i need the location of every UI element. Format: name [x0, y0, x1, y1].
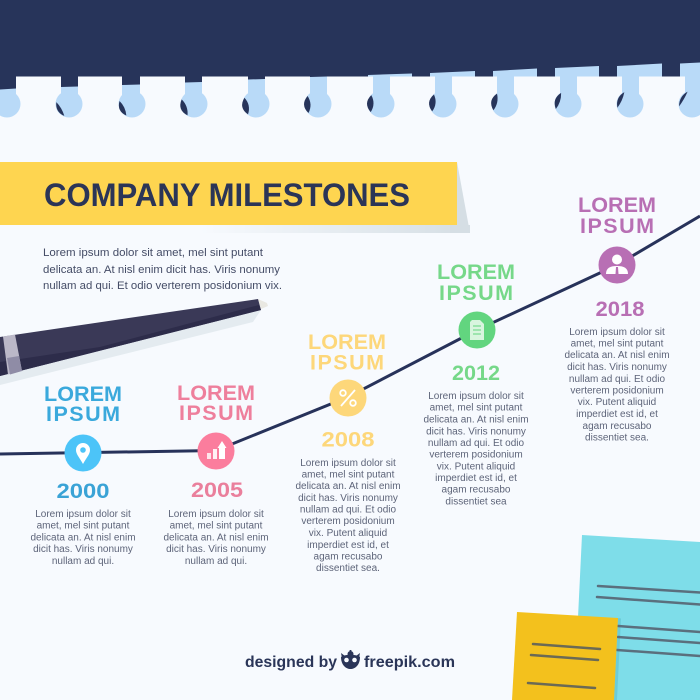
title: COMPANY MILESTONES [44, 177, 410, 213]
body text: 2005: delicata an. At nisl enim [163, 532, 269, 544]
body text: 2008: amet, mel sint putant [302, 470, 395, 480]
year: 2005: 2005 [191, 479, 243, 502]
heading: 2018: IPSUM [580, 214, 654, 238]
footer credit: designed by [245, 654, 337, 671]
body text: 2000: delicata an. At nisl enim [30, 532, 136, 544]
dark header band with binder tabs [0, 0, 700, 90]
footer credit: freepik.com [364, 654, 455, 671]
year: 2000: 2000 [56, 480, 110, 503]
heading: 2005 [177, 381, 255, 425]
body text: 2005: Lorem ipsum dolor sit [168, 509, 264, 520]
intro text: nullam ad qui. Et odio verterem posidonium vix. [43, 280, 282, 292]
body text: 2012: vix. Putent aliquid [437, 462, 515, 472]
body text: 2018: dicit has. Viris nonumy [567, 362, 667, 373]
footer credit [245, 650, 455, 671]
heading: 2000: IPSUM [46, 402, 120, 426]
body text: 2012: verterem posidonium [429, 450, 523, 460]
body text: 2018 [564, 327, 670, 444]
body text: 2008: delicata an. At nisl enim [295, 481, 401, 492]
heading: 2008: IPSUM [310, 350, 384, 374]
body text: 2018: Lorem ipsum dolor sit [569, 327, 665, 338]
pen [0, 299, 268, 385]
year: 2008: 2008 [322, 428, 375, 452]
body text: 2018: agam recusabo [583, 421, 652, 432]
intro text: Lorem ipsum dolor sit amet, mel sint putant [43, 247, 263, 259]
heading: 2005: IPSUM [179, 401, 253, 425]
body text: 2018: dissentiet sea. [585, 432, 649, 444]
milestone 2008 [295, 330, 401, 574]
year: 2018: 2018 [596, 298, 645, 321]
heading: 2018: LOREM [578, 193, 656, 217]
body text: 2008: Lorem ipsum dolor sit [300, 458, 396, 469]
milestone 2000 [30, 382, 136, 567]
body text: 2012: nullam ad qui. Et odio [428, 438, 525, 449]
body text: 2018: delicata an. At nisl enim [564, 350, 670, 361]
body text: 2000: dicit has. Viris nonumy [33, 544, 133, 555]
body text: 2018: verterem posidonium [570, 386, 664, 396]
heading: 2012: IPSUM [439, 281, 513, 305]
body text: 2005: amet, mel sint putant [170, 520, 263, 532]
icon: document [458, 312, 496, 348]
yellow sticky note [512, 612, 618, 700]
icon: percent [330, 380, 366, 416]
milestone 2005 [163, 381, 269, 567]
icon: location pin [64, 434, 102, 472]
body text: 2008: verterem posidonium [301, 516, 395, 527]
body text: 2012: imperdiet est id, et [435, 473, 517, 484]
icon: person [598, 246, 636, 284]
body text: 2008: imperdiet est id, et [307, 540, 389, 551]
heading: 2000 [44, 382, 122, 426]
body text: 2018: imperdiet est id, et [576, 409, 658, 420]
body text: 2008: vix. Putent aliquid [309, 528, 387, 539]
body text: 2012: amet, mel sint putant [430, 402, 523, 414]
body text: 2008: dicit has. Viris nonumy [298, 493, 398, 504]
heading: 2000: LOREM [44, 382, 122, 406]
heading: 2008: LOREM [308, 330, 386, 354]
body text: 2012: Lorem ipsum dolor sit [428, 391, 524, 402]
body text: 2008: nullam ad qui. Et odio [300, 504, 397, 516]
body text: 2018: vix. Putent aliquid [578, 397, 656, 408]
heading: 2012 [437, 260, 515, 305]
timeline line [0, 216, 700, 454]
year: 2012: 2012 [452, 362, 500, 385]
body text: 2012: agam recusabo [442, 484, 511, 496]
body text: 2008: dissentiet sea. [316, 563, 380, 574]
spiral binding rings [0, 62, 700, 118]
milestone 2018 [564, 193, 670, 444]
body text: 2000 [30, 509, 136, 567]
title banner [0, 162, 470, 233]
body text: 2018: amet, mel sint putant [571, 338, 664, 350]
body text: 2000: amet, mel sint putant [37, 520, 130, 532]
body text: 2005: nullam ad qui. [185, 556, 247, 567]
heading: 2005: LOREM [177, 381, 255, 405]
body text: 2012: delicata an. At nisl enim [423, 414, 529, 426]
icon: bar chart [198, 432, 234, 470]
body text: 2008 [295, 458, 401, 574]
body text: 2018: nullam ad qui. Et odio [569, 374, 666, 385]
heading: 2012: LOREM [437, 260, 515, 284]
body text: 2008: agam recusabo [314, 552, 383, 562]
heading: 2008 [308, 330, 386, 374]
body text: 2012: dicit has. Viris nonumy [426, 426, 526, 438]
intro text: delicata an. At nisl enim dicit has. Viris nonumy [43, 264, 281, 276]
body text: 2005: dicit has. Viris nonumy [166, 544, 266, 555]
heading: 2018 [578, 193, 656, 238]
milestone 2012 [423, 260, 529, 508]
body text: 2000: nullam ad qui. [52, 556, 114, 567]
intro text [43, 247, 282, 292]
body text: 2000: Lorem ipsum dolor sit [35, 509, 131, 520]
body text: 2012: dissentiet sea [445, 496, 507, 508]
blue sticky note [574, 535, 700, 700]
body text: 2012 [423, 391, 529, 508]
body text: 2005 [163, 509, 269, 567]
icon: freepik logo [341, 650, 360, 669]
